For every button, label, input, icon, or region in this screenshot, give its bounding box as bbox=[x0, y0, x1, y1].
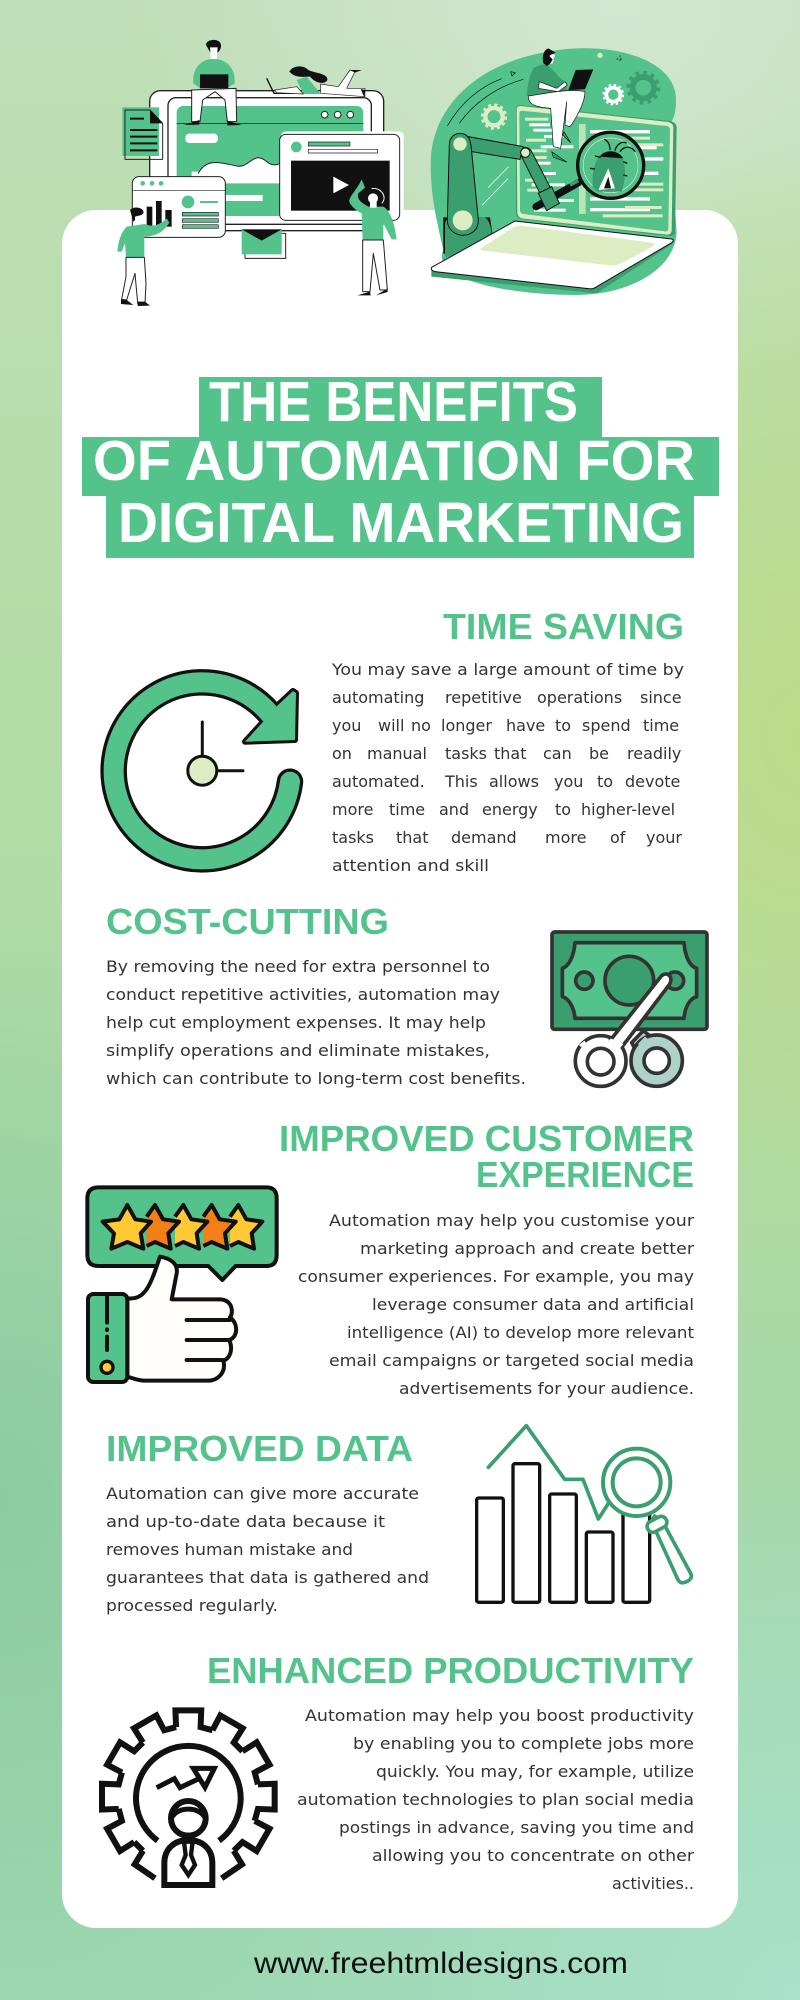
text: cost-cutting body: simplify operations and eliminate mistakes, bbox=[106, 1041, 490, 1060]
icon: manager inside gear bbox=[101, 1710, 275, 1885]
text: enhanced productivity body: Automation may help you boost productivity bbox=[305, 1706, 694, 1725]
icon: clock with circular arrow bbox=[114, 682, 296, 859]
text: time saving body: higher-level bbox=[581, 800, 675, 819]
section: cost-cutting bbox=[106, 901, 707, 1088]
text: time saving body: to bbox=[597, 772, 613, 791]
text: customer experience body: leverage consumer data and artificial bbox=[372, 1295, 694, 1314]
text: time saving body: and bbox=[439, 800, 469, 819]
text: time saving body: readily bbox=[627, 744, 681, 763]
panel: white content card bbox=[62, 210, 738, 1928]
heading: enhanced productivity: ENHANCED PRODUCTIVITY bbox=[207, 1650, 694, 1691]
text: improved data body bbox=[106, 1484, 429, 1615]
text: time saving body: tasks bbox=[445, 744, 487, 763]
text: time saving body bbox=[331, 660, 684, 875]
heading: improved data: IMPROVED DATA bbox=[106, 1428, 413, 1469]
text: customer experience body: advertisements for your audience. bbox=[399, 1379, 694, 1398]
text: cost-cutting body: By removing the need for extra personnel to bbox=[106, 957, 490, 976]
text: enhanced productivity body: postings in advance, saving you time and bbox=[339, 1818, 694, 1837]
text: cost-cutting body: which can contribute to long-term cost benefits. bbox=[106, 1069, 526, 1088]
heading: time saving: TIME SAVING bbox=[443, 606, 684, 647]
text: time saving body: more bbox=[545, 828, 586, 847]
text: time saving body: repetitive bbox=[445, 688, 522, 707]
heading: improved customer experience bbox=[279, 1118, 694, 1195]
text: time saving body: tasks bbox=[332, 828, 374, 847]
text: cost-cutting body bbox=[106, 957, 526, 1088]
icon: bar chart with magnifier bbox=[477, 1426, 691, 1602]
text: time saving body: spend bbox=[582, 716, 631, 735]
section: improved data bbox=[106, 1426, 691, 1615]
section: time saving bbox=[114, 606, 684, 875]
text: improved data body: processed regularly. bbox=[106, 1596, 278, 1615]
text: time saving body: longer bbox=[441, 716, 492, 735]
text: customer experience body: marketing approach and create better bbox=[360, 1239, 694, 1258]
text: time saving body: This bbox=[444, 772, 478, 791]
text: time saving body: be bbox=[589, 744, 609, 763]
text: time saving body: automating bbox=[332, 688, 424, 707]
text: time saving body: that bbox=[494, 744, 526, 763]
text: time saving body: have bbox=[506, 716, 545, 735]
text: time saving body: time bbox=[389, 800, 425, 819]
text: time saving body: You may save a large amount of time by bbox=[331, 660, 684, 679]
heading: cost-cutting: COST-CUTTING bbox=[106, 901, 389, 942]
text: time saving body: you bbox=[332, 716, 361, 735]
text: time saving body: can bbox=[543, 744, 572, 763]
illustration: robot arm debugging code on a laptop bbox=[430, 48, 677, 295]
title text: OF AUTOMATION FOR bbox=[93, 429, 695, 493]
heading: improved customer experience: IMPROVED CUSTOMER bbox=[279, 1118, 694, 1159]
text: time saving body: no bbox=[411, 716, 431, 735]
text: time saving body: on bbox=[332, 744, 352, 763]
text: improved data body: Automation can give more accurate bbox=[106, 1484, 419, 1503]
text: customer experience body: email campaigns or targeted social media bbox=[329, 1351, 694, 1370]
title text bbox=[93, 370, 695, 555]
text: time saving body: since bbox=[640, 688, 682, 707]
text: time saving body: will bbox=[378, 716, 404, 735]
text: time saving body: operations bbox=[537, 688, 622, 707]
footer: website address: www.freehtmldesigns.com bbox=[253, 1947, 628, 1980]
text: enhanced productivity body: by enabling you to complete jobs more bbox=[353, 1734, 694, 1753]
text: time saving body: demand bbox=[451, 828, 517, 847]
text: time saving body: to bbox=[555, 800, 571, 819]
text: customer experience body: Automation may help you customise your bbox=[329, 1211, 694, 1230]
title bbox=[82, 370, 719, 558]
text: time saving body: that bbox=[396, 828, 428, 847]
text: time saving body: manual bbox=[367, 744, 427, 763]
text: time saving body: of bbox=[610, 828, 626, 847]
text: time saving body: allows bbox=[489, 772, 539, 791]
title text: THE BENEFITS bbox=[209, 370, 578, 434]
text: time saving body: devote bbox=[625, 772, 680, 791]
text: time saving body: to bbox=[555, 716, 571, 735]
text: enhanced productivity body: allowing you to concentrate on other bbox=[372, 1846, 694, 1865]
icon: thumbs up with star rating bbox=[87, 1187, 277, 1382]
text: time saving body: more bbox=[332, 800, 373, 819]
text: time saving body: time bbox=[643, 716, 679, 735]
text: improved data body: and up-to-date data because it bbox=[106, 1512, 385, 1531]
heading: improved customer experience: EXPERIENCE bbox=[476, 1154, 694, 1195]
text: time saving body: your bbox=[646, 828, 682, 847]
text: enhanced productivity body: quickly. You may, for example, utilize bbox=[376, 1762, 694, 1781]
text: customer experience body: intelligence (AI) to develop more relevant bbox=[347, 1323, 694, 1342]
text: time saving body: energy bbox=[482, 800, 538, 819]
text: improved data body: removes human mistake and bbox=[106, 1540, 353, 1559]
text: customer experience body bbox=[298, 1211, 694, 1398]
text: time saving body: attention and skill bbox=[332, 856, 489, 875]
text: customer experience body: consumer experiences. For example, you may bbox=[298, 1267, 694, 1286]
section: improved customer experience bbox=[87, 1118, 694, 1398]
text: cost-cutting body: help cut employment expenses. It may help bbox=[106, 1013, 486, 1032]
illustration: team working on a website bbox=[117, 40, 404, 306]
text: enhanced productivity body: activities.. bbox=[612, 1874, 694, 1893]
text: time saving body: you bbox=[554, 772, 583, 791]
text: cost-cutting body: conduct repetitive activities, automation may bbox=[106, 985, 500, 1004]
title highlight blocks bbox=[82, 377, 719, 558]
text: improved data body: guarantees that data is gathered and bbox=[106, 1568, 429, 1587]
text: enhanced productivity body: automation technologies to plan social media bbox=[297, 1790, 694, 1809]
text: time saving body: automated. bbox=[332, 772, 425, 791]
section: enhanced productivity bbox=[101, 1650, 694, 1893]
title text: DIGITAL MARKETING bbox=[118, 491, 684, 555]
icon: scissors cutting banknote bbox=[552, 932, 707, 1086]
text: enhanced productivity body bbox=[297, 1706, 694, 1893]
